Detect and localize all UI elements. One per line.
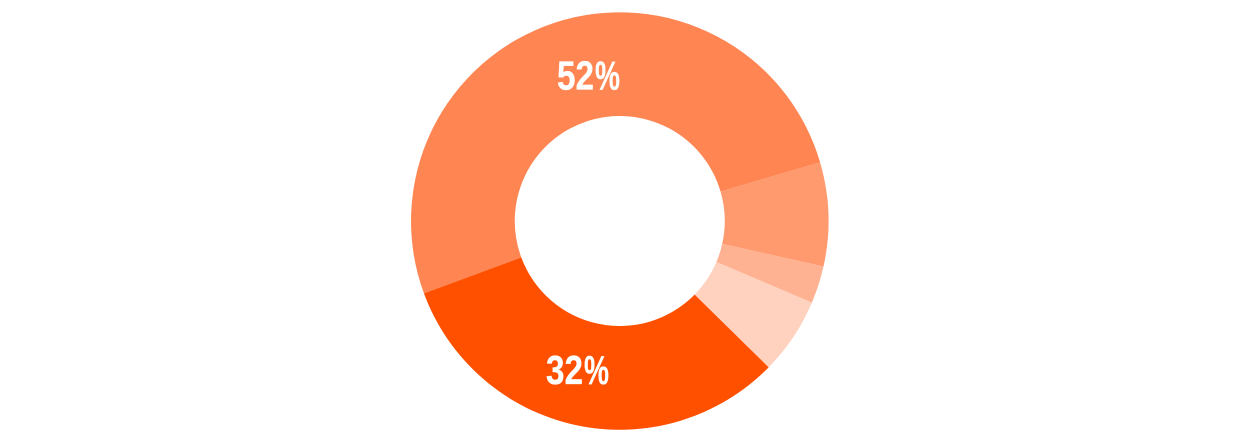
segment: second slice <box>721 162 828 267</box>
segment: third slice <box>716 244 823 303</box>
label: 32%: 32 <box>546 347 583 393</box>
segment: fourth slice <box>695 262 812 367</box>
label: 52%: % <box>595 52 620 98</box>
segment: 32% <box>424 257 769 430</box>
segment: 52% <box>411 12 820 293</box>
label: 32%: % <box>584 347 609 393</box>
label: 52%: 52 <box>557 52 594 98</box>
